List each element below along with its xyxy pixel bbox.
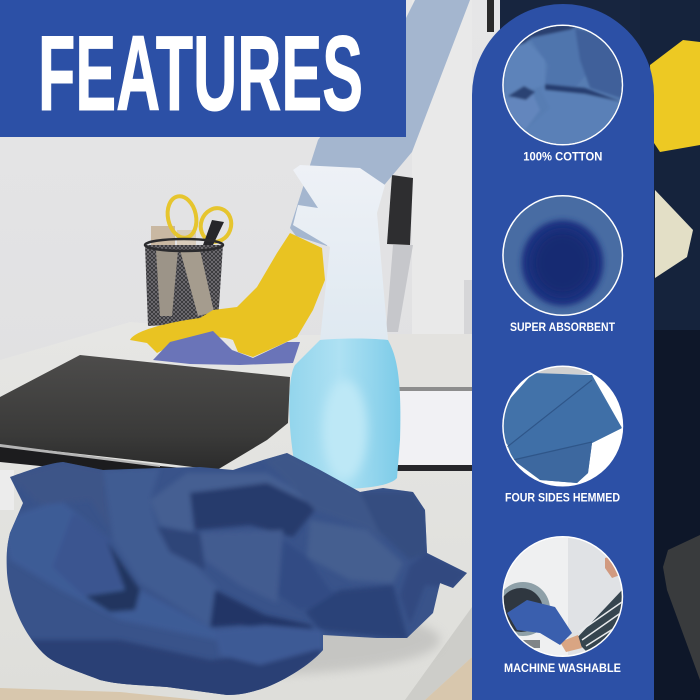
- grey shape at right edge: [663, 535, 700, 680]
- panel: features column: [472, 4, 654, 700]
- pencil holder with scissors: [145, 194, 236, 326]
- yellow glove at right edge: [650, 40, 700, 152]
- label: MACHINE WASHABLE: [504, 663, 621, 675]
- title banner: [0, 0, 406, 137]
- feature: machine washable: [502, 536, 624, 672]
- laptop: [0, 355, 290, 478]
- feature: four sides hemmed: [500, 364, 626, 505]
- yellow rubber glove: [130, 233, 325, 357]
- blue sleeve of arm: [290, 0, 470, 246]
- blue cloth under glove: [153, 331, 300, 365]
- pile of blue cloth rags: [0, 453, 467, 700]
- cloth fold shading: [0, 453, 467, 700]
- feature: 100% cotton: [500, 24, 626, 164]
- label: SUPER ABSORBENT: [510, 322, 615, 334]
- bottle at right edge: [655, 190, 693, 278]
- title: FEATURES: [38, 13, 363, 133]
- label: FOUR SIDES HEMMED: [505, 493, 620, 505]
- label: 100% COTTON: [523, 152, 602, 164]
- lanyard strap: [487, 0, 494, 32]
- right dark background strip: [487, 0, 700, 700]
- feature: super absorbent: [500, 194, 626, 334]
- spray bottle: [289, 165, 400, 489]
